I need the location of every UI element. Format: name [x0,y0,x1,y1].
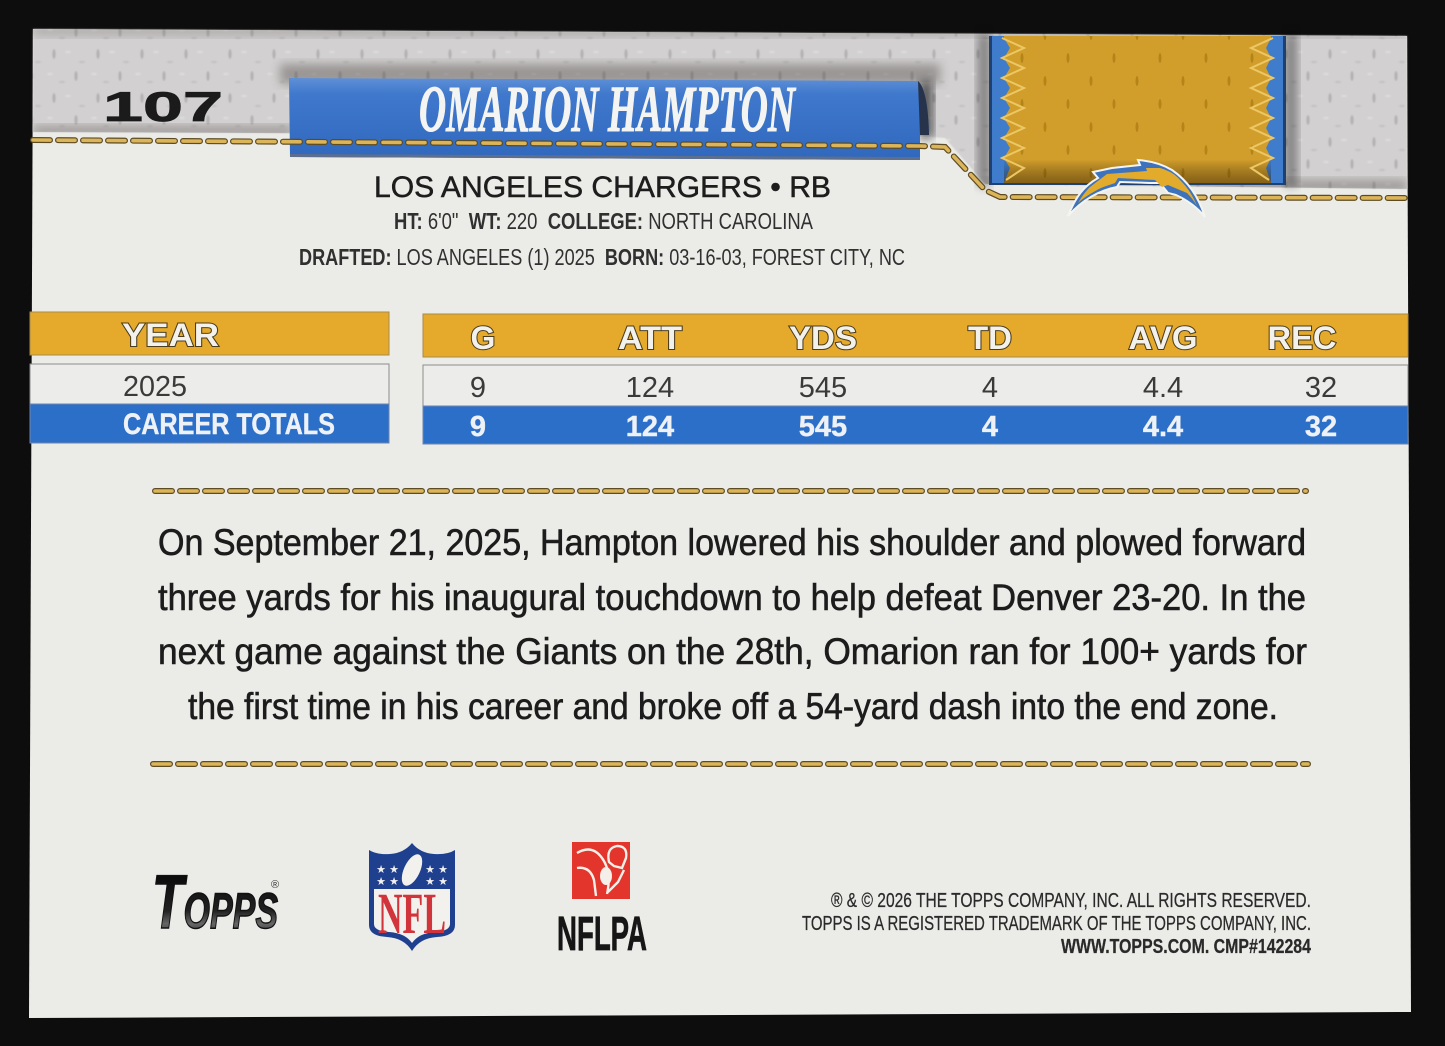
jersey patch [978,34,1297,186]
career highlight paragraph: On September 21, 2025, Hampton lowered his shoulder and plowed forward [158,522,1306,563]
career highlight paragraph: the first time in his career and broke off a 54-yard dash into the end zone. [188,686,1278,727]
NFL shield logo: ★ [438,876,448,888]
stats table: year column: 2025 [123,371,187,403]
Topps logo: TOPPS [152,860,278,945]
stats table: year column [30,312,389,443]
NFL shield logo: ★ [389,864,399,876]
stats table: stat columns: 9 [470,411,486,443]
stats table: year column: YEAR [122,317,219,353]
player name: OMARION HAMPTON [419,73,796,146]
stitched divider above [155,488,1306,494]
bio line 1: HT: 6'0" WT: 220 COLLEGE: NORTH CAROLINA [394,208,814,234]
stats table: stat columns: AVG [1128,320,1198,356]
legal copyright text [802,890,1312,958]
stats table: stat columns: 4.4 [1143,372,1183,404]
stitched divider below [153,761,1308,767]
stats table: stat columns: 32 [1305,411,1337,443]
stitching: top seam [33,140,1407,198]
name banner [289,73,932,160]
NFL shield logo: NFL [378,881,446,946]
NFL shield logo: ★ [425,864,435,876]
NFL shield logo: ★ [376,864,386,876]
NFL shield logo: ★ [389,876,399,888]
stats table: year column: CAREER TOTALS [123,408,335,441]
career highlight paragraph [158,522,1307,727]
stats table: stat columns: 124 [626,372,674,404]
NFLPA logo: NFLPA [557,908,647,961]
NFL shield logo: ★ [376,876,386,888]
legal copyright text: ® & © 2026 THE TOPPS COMPANY, INC. ALL RIGHTS RESERVED. [831,890,1311,912]
stats table: stat columns: YDS [789,320,857,356]
team logo: lightning bolt [1068,160,1205,217]
stats table: stat columns [423,314,1408,444]
stats table: stat columns: 4 [982,372,998,404]
stats table: stat columns: ATT [618,320,682,356]
team and position: LOS ANGELES CHARGERS • RB [374,171,831,204]
NFLPA logo [557,842,647,961]
stats table: stat columns: TD [968,320,1012,356]
jersey mesh band [33,26,1407,192]
legal copyright text: WWW.TOPPS.COM. CMP#142284 [1061,936,1312,958]
stats table: stat columns: REC [1268,320,1336,356]
stats table: stat columns: 4 [982,411,998,443]
career highlight paragraph: next game against the Giants on the 28th, Omarion ran for 100+ yards for [158,631,1307,672]
Topps logo: ® [271,879,279,891]
NFL shield logo: ★ [438,864,448,876]
stats table: stat columns: 32 [1305,372,1337,404]
stats table: stat columns: 545 [799,411,847,443]
NFL shield logo: ★ [425,876,435,888]
stats table: stat columns: 9 [470,372,486,404]
stats table: stat columns: 4.4 [1143,411,1183,443]
stats table: stat columns: 545 [799,372,847,404]
NFL shield logo [369,843,455,951]
card number: 107 [103,83,223,130]
bio line 2: DRAFTED: LOS ANGELES (1) 2025 BORN: 03-16-03, FOREST CITY, NC [299,244,905,270]
career highlight paragraph: three yards for his inaugural touchdown to help defeat Denver 23-20. In the [158,577,1306,618]
stats table: stat columns: 124 [626,411,674,443]
stats table: stat columns: G [471,320,495,356]
